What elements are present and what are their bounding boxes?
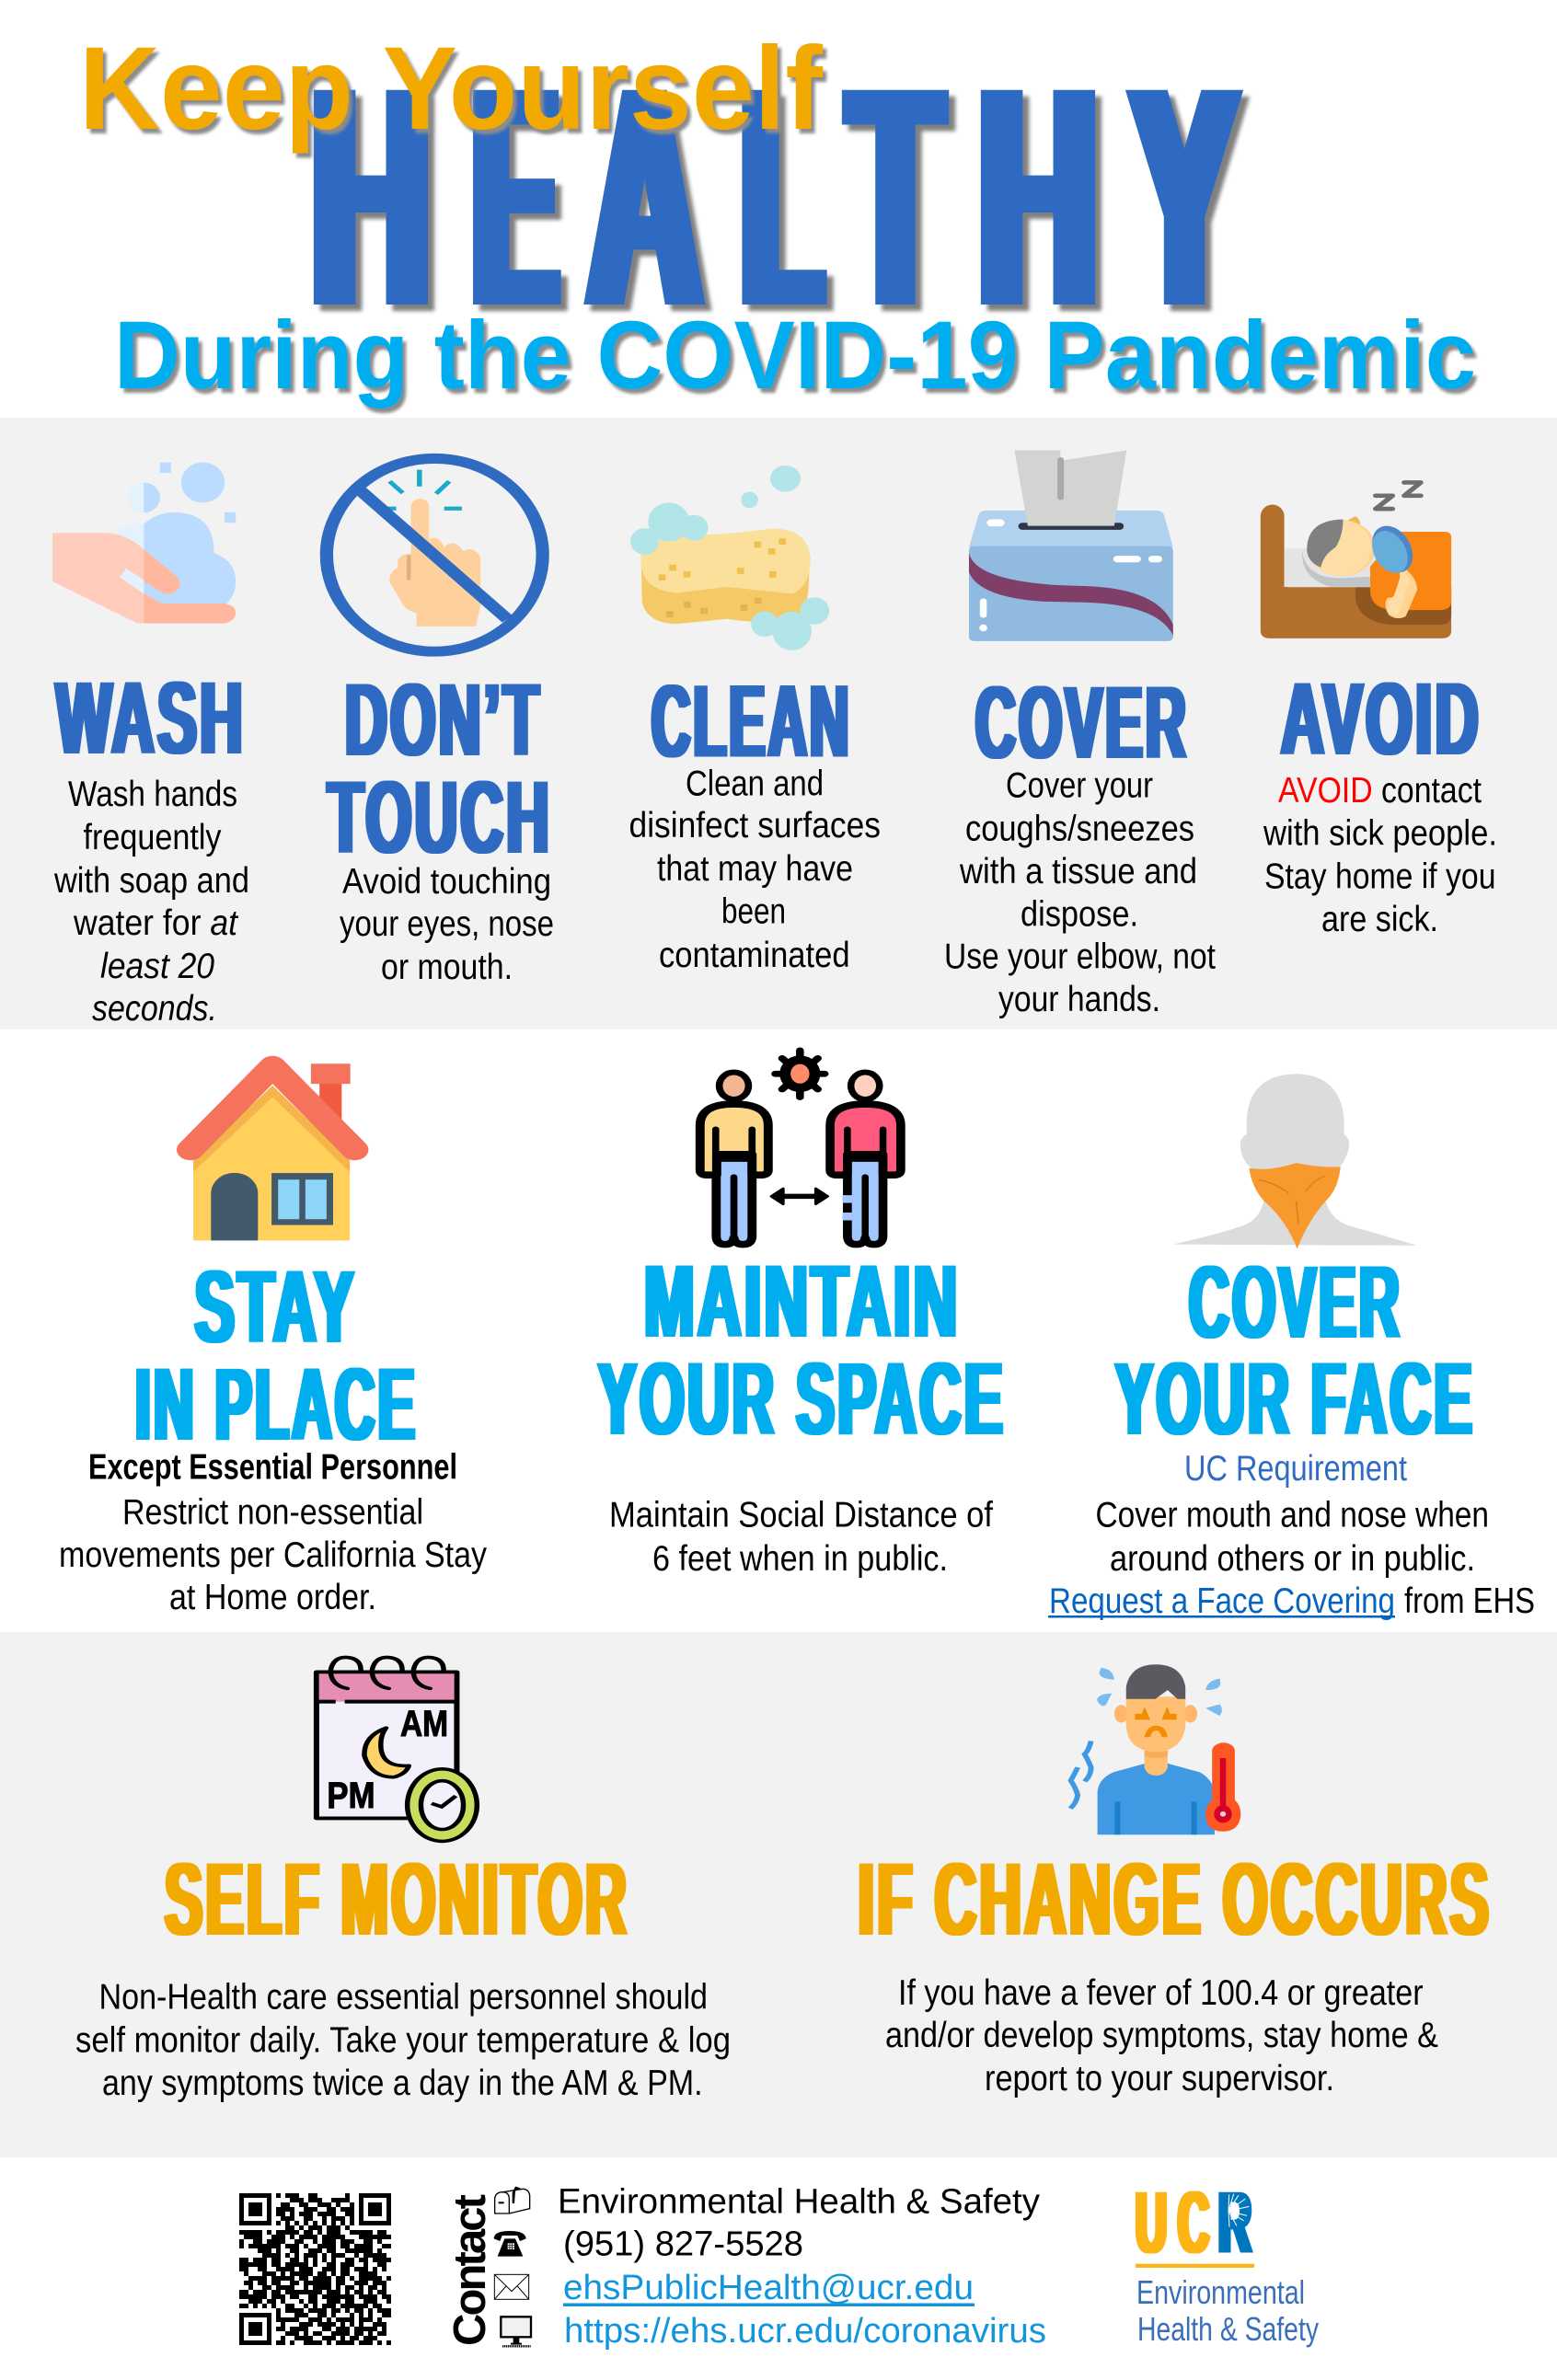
icon: person sleeping in bed bbox=[1261, 482, 1451, 638]
item: cover cough bbox=[944, 450, 1216, 1019]
title: HEALTHY bbox=[312, 22, 1237, 371]
text: cover your face description: UC Requirement bbox=[1184, 1449, 1407, 1489]
text: cover description: Cover your bbox=[1006, 766, 1153, 806]
heading: STAY IN PLACE: STAY bbox=[195, 1249, 357, 1364]
title: HEALTHY: L bbox=[743, 22, 822, 371]
text: maintain space description bbox=[609, 1495, 993, 1579]
label: Contact: Contact bbox=[445, 2194, 495, 2346]
text: clean description: been bbox=[721, 892, 786, 932]
text: don't touch description: or mouth. bbox=[381, 948, 513, 987]
item: avoid bbox=[1261, 482, 1497, 939]
text: clean description: disinfect surfaces bbox=[629, 806, 881, 845]
title: HEALTHY: Y bbox=[1132, 22, 1237, 371]
icon: mailbox bbox=[495, 2187, 530, 2213]
item: don't touch bbox=[327, 458, 554, 987]
text: stay in place description: movements per California Stay bbox=[59, 1535, 488, 1575]
text: don't touch description: your eyes, nose bbox=[340, 904, 554, 944]
heading: MAINTAIN YOUR SPACE: MAINTAIN bbox=[644, 1244, 961, 1359]
text: if change occurs description: If you have a fever of 100.4 or greater bbox=[898, 1973, 1424, 2013]
text: stay in place description: Except Essential Personnel bbox=[88, 1448, 457, 1488]
text: maintain space description: Maintain Social Distance of bbox=[609, 1495, 993, 1535]
text: cover description: dispose. bbox=[1021, 894, 1138, 935]
icon: head with face covering bbox=[1172, 1074, 1417, 1248]
icon: calendar with clock bbox=[317, 1657, 477, 1841]
title: Keep Yourself: Keep Yourself bbox=[79, 23, 823, 155]
text: don't touch description: Avoid touching bbox=[342, 862, 551, 902]
text: if change occurs description: report to your supervisor. bbox=[985, 2059, 1334, 2098]
title: HEALTHY: A bbox=[589, 22, 700, 371]
heading: COVER YOUR FACE bbox=[1115, 1245, 1475, 1456]
text: don't touch description bbox=[340, 862, 554, 987]
icon: calendar with clock: AM bbox=[400, 1703, 448, 1744]
text: contact details: ehsPublicHealth@ucr.edu bbox=[563, 2269, 974, 2307]
text: if change occurs description: and/or develop symptoms, stay home & bbox=[885, 2016, 1438, 2055]
heading: CLEAN: CLEAN bbox=[652, 664, 852, 778]
text: avoid description: Stay home if you bbox=[1264, 857, 1496, 897]
text: cover your face description: Request a Face Covering bbox=[1049, 1581, 1395, 1621]
heading: MAINTAIN YOUR SPACE bbox=[598, 1244, 1006, 1456]
logo: UCR Environmental Health & Safety bbox=[1136, 2173, 1319, 2348]
icon: crossed-out touching hand bbox=[327, 458, 543, 651]
icon: two people apart with virus bbox=[700, 1051, 901, 1245]
text: cover your face description: around others or in public. bbox=[1110, 1539, 1475, 1579]
item: clean bbox=[629, 466, 881, 975]
text: clean description: contaminated bbox=[659, 936, 850, 975]
title: HEALTHY: T bbox=[849, 22, 941, 371]
icon: feverish person with thermometer bbox=[1070, 1664, 1240, 1834]
text: if change occurs description bbox=[885, 1973, 1438, 2098]
icon: washing hand bbox=[52, 463, 236, 623]
text: avoid description: are sick. bbox=[1321, 900, 1438, 939]
text: stay in place description bbox=[59, 1448, 488, 1617]
text: wash description: Wash hands bbox=[68, 775, 237, 814]
text: wash description: with soap and bbox=[53, 861, 249, 901]
logo: UCR Environmental Health & Safety: Health & Safety bbox=[1137, 2310, 1319, 2348]
heading: STAY IN PLACE: IN PLACE bbox=[135, 1347, 418, 1462]
text: cover description: coughs/sneezes bbox=[965, 809, 1194, 848]
text: stay in place description: at Home order. bbox=[169, 1578, 376, 1617]
heading: MAINTAIN YOUR SPACE: YOUR SPACE bbox=[598, 1341, 1006, 1456]
icon: sponge with foam bbox=[630, 466, 829, 650]
title: HEALTHY: H bbox=[312, 22, 430, 371]
text: self monitor description bbox=[75, 1978, 731, 2103]
logo: UCR Environmental Health & Safety: R bbox=[1218, 2173, 1251, 2271]
QR code bbox=[239, 2195, 391, 2342]
panel: distancing actions bbox=[0, 1029, 1557, 1632]
heading: SELF MONITOR: SELF MONITOR bbox=[165, 1842, 629, 1957]
heading: WASH: WASH bbox=[56, 661, 246, 776]
icon: computer bbox=[501, 2317, 531, 2346]
logo: UCR Environmental Health & Safety: Environmental bbox=[1136, 2273, 1305, 2311]
icon: calendar with clock: PM bbox=[327, 1775, 375, 1815]
item: if change occurs bbox=[858, 1664, 1492, 2098]
text: wash description: seconds. bbox=[92, 989, 217, 1029]
logo: UCR Environmental Health & Safety: C bbox=[1178, 2173, 1209, 2271]
text: wash description: least 20 bbox=[100, 947, 215, 986]
icon: telephone bbox=[494, 2231, 526, 2257]
heading: STAY IN PLACE bbox=[135, 1249, 418, 1462]
text: wash description: frequently bbox=[83, 818, 222, 857]
text: contact details bbox=[558, 2183, 1046, 2351]
icon: envelope bbox=[494, 2274, 529, 2299]
heading: DON'T TOUCH: DON’T bbox=[345, 662, 542, 777]
text: clean description: Clean and bbox=[686, 764, 824, 804]
text: avoid description: AVOID contact bbox=[1278, 771, 1482, 811]
text: avoid description: with sick people. bbox=[1263, 813, 1497, 854]
text: self monitor description: any symptoms twice a day in the AM & PM. bbox=[102, 2064, 703, 2103]
subtitle: During the COVID-19 Pandemic: During the COVID-19 Pandemic bbox=[114, 302, 1476, 409]
text: cover your face description bbox=[1048, 1449, 1535, 1621]
text: wash description bbox=[53, 775, 249, 1029]
icon: tissue box bbox=[969, 450, 1173, 641]
panel: hygiene actions bbox=[0, 418, 1557, 1029]
text: clean description bbox=[629, 764, 881, 975]
text: avoid description bbox=[1263, 771, 1497, 939]
text: cover description: with a tissue and bbox=[959, 852, 1197, 891]
text: self monitor description: Non-Health care essential personnel should bbox=[99, 1978, 708, 2018]
text: wash description: water for at bbox=[73, 903, 239, 943]
heading: COVER: COVER bbox=[975, 665, 1189, 780]
text: contact details: Environmental Health & Safety bbox=[558, 2183, 1040, 2222]
text: maintain space description: 6 feet when in public. bbox=[652, 1539, 948, 1579]
title block bbox=[79, 22, 1476, 409]
panel: monitoring actions bbox=[0, 1632, 1557, 2157]
logo: UCR Environmental Health & Safety: U bbox=[1136, 2173, 1167, 2271]
text: cover your face description: from EHS bbox=[1404, 1581, 1535, 1621]
text: cover description: Use your elbow, not bbox=[944, 937, 1216, 977]
item: self monitor bbox=[75, 1657, 731, 2103]
heading: DON'T TOUCH bbox=[328, 662, 552, 875]
text: clean description: that may have bbox=[657, 849, 853, 889]
icon: house bbox=[190, 1064, 355, 1240]
heading: DON'T TOUCH: TOUCH bbox=[328, 760, 552, 875]
text: cover description: your hands. bbox=[998, 980, 1160, 1019]
item: stay in place bbox=[59, 1064, 488, 1617]
text: self monitor description: self monitor daily. Take your temperature & log bbox=[75, 2021, 731, 2061]
item: wash bbox=[52, 463, 249, 1029]
item: cover your face bbox=[1048, 1074, 1535, 1621]
title: HEALTHY: E bbox=[474, 22, 557, 371]
text: contact details: (951) 827-5528 bbox=[563, 2225, 803, 2264]
text: cover description bbox=[944, 766, 1216, 1019]
text: cover your face description: Cover mouth and nose when bbox=[1095, 1495, 1489, 1535]
item: maintain space bbox=[598, 1051, 1006, 1579]
title: HEALTHY: H bbox=[979, 22, 1097, 371]
text: contact details: https://ehs.ucr.edu/coronavirus bbox=[564, 2312, 1046, 2351]
text: stay in place description: Restrict non-essential bbox=[122, 1492, 423, 1533]
panel: contact footer bbox=[0, 2157, 1557, 2380]
